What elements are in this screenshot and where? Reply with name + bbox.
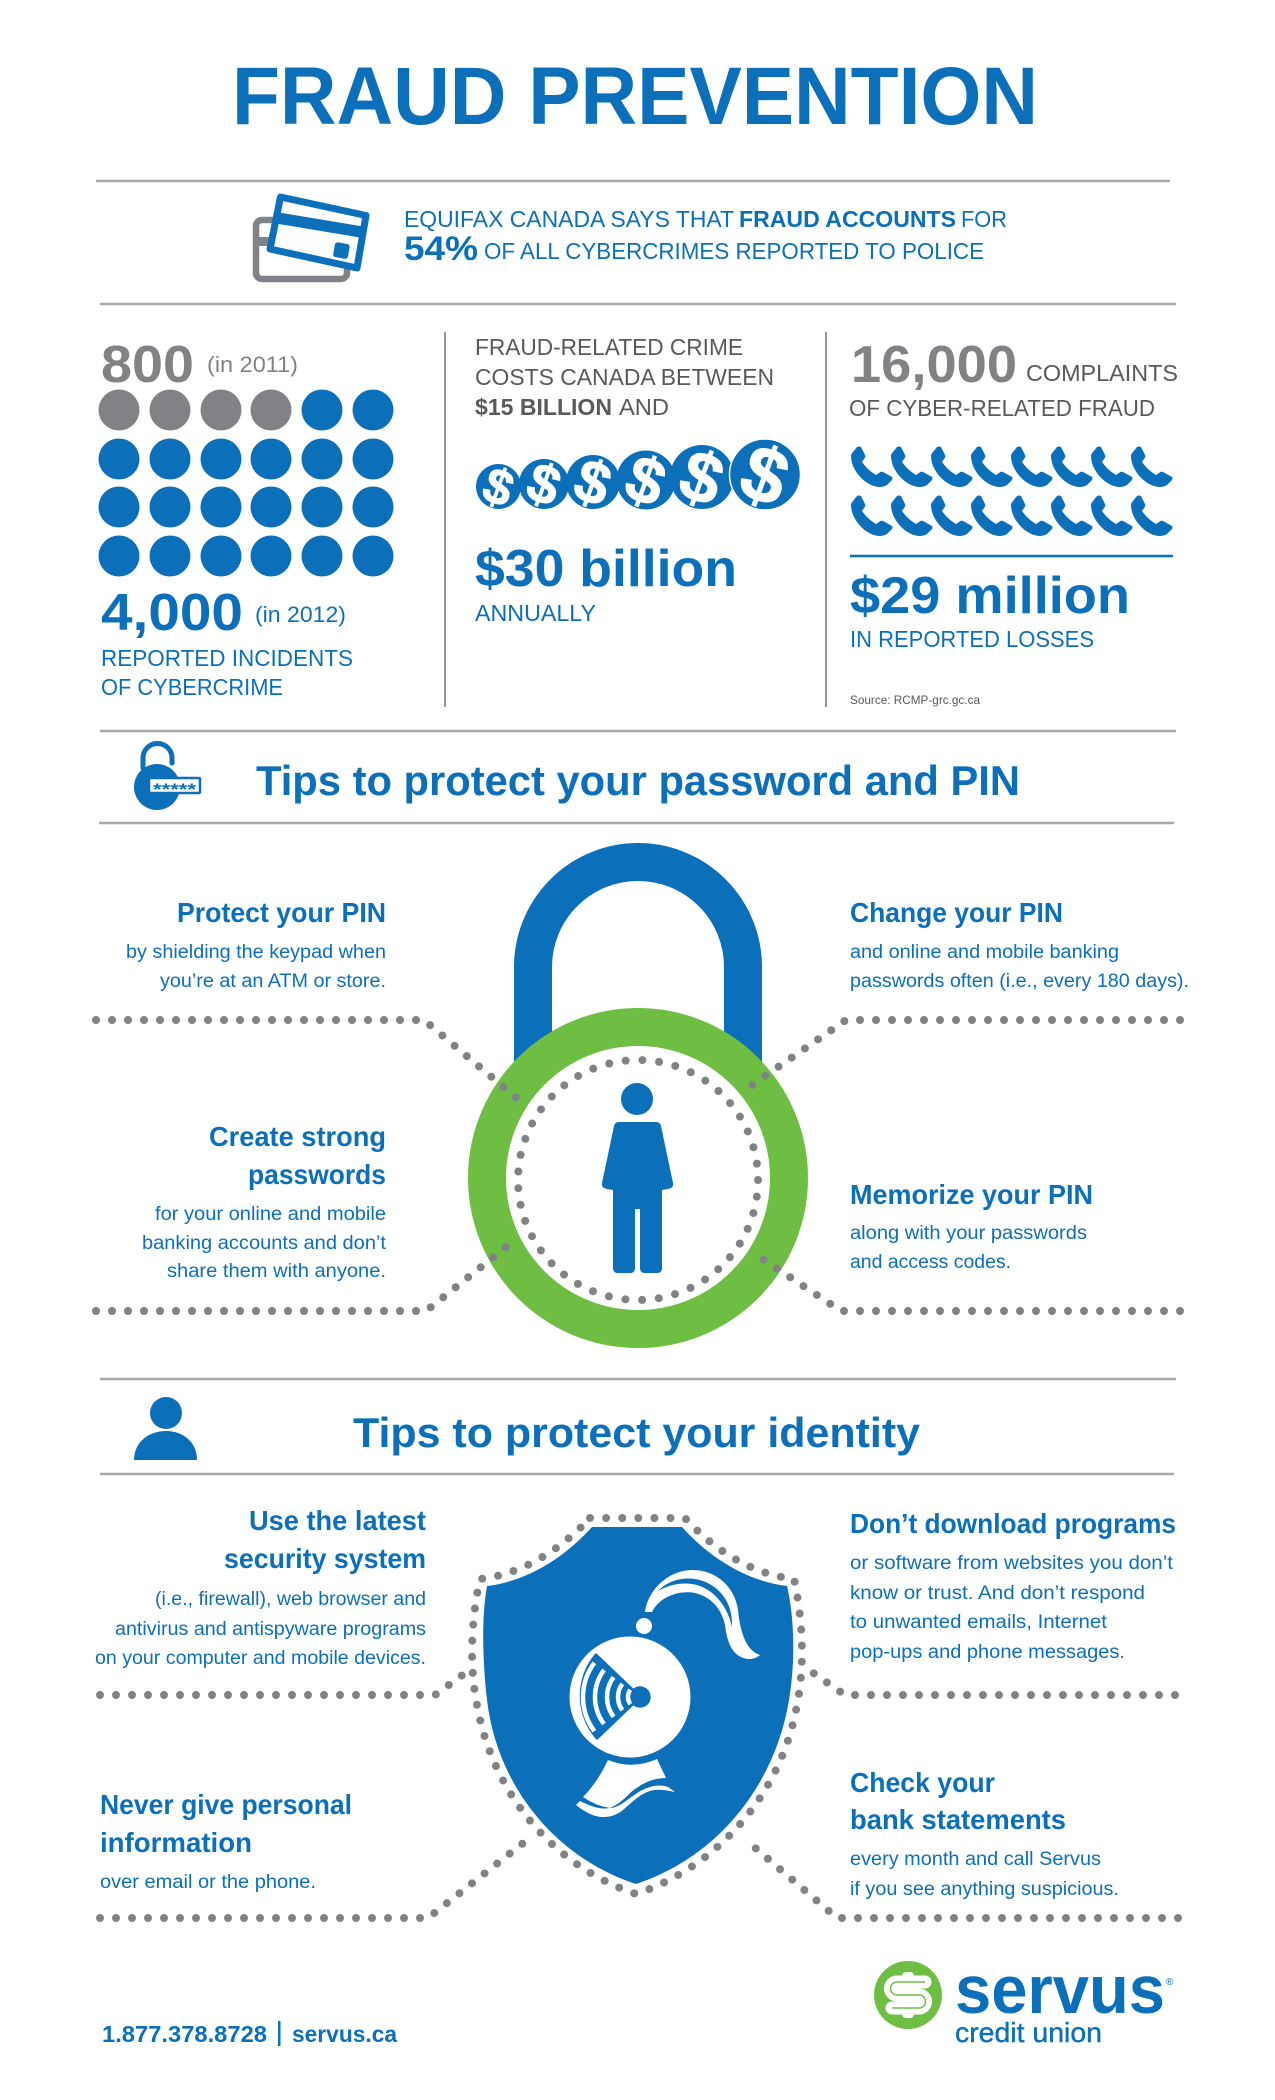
tip: check your bank statements: bank statements <box>850 1804 1066 1835</box>
tip: check your bank statements: Check your <box>850 1767 995 1798</box>
tip: use the latest security system: security system <box>224 1543 426 1574</box>
title: FRAUD PREVENTION <box>232 51 1038 142</box>
connector: latest security system <box>100 1671 468 1695</box>
tip: create strong passwords: Create strong <box>209 1121 386 1152</box>
tip: never give personal information: over email or the phone. <box>100 1872 316 1893</box>
icon: growing dollar coins: $ <box>476 456 521 518</box>
tip: don't download programs: pop-ups and phone messages. <box>850 1642 1125 1663</box>
connector: protect your PIN <box>96 1020 526 1106</box>
graphic: padlock with person <box>487 862 789 1329</box>
tip: check your bank statements: every month and call Servus <box>850 1849 1101 1870</box>
headline statistic: fraud accounts: FRAUD ACCOUNTS <box>739 206 956 232</box>
$29 million in reported losses: $29 million <box>850 567 1130 625</box>
logo: Servus Credit Union: credit union <box>955 2017 1102 2048</box>
16,000 complaints: COMPLAINTS <box>1026 360 1178 386</box>
headline statistic: fraud accounts <box>404 206 1007 268</box>
4,000 in 2012: 4,000 <box>101 584 243 642</box>
tip: protect your PIN <box>126 897 386 992</box>
headline statistic: fraud accounts: EQUIFAX CANADA SAYS THAT <box>404 206 734 232</box>
$30 billion annually: $30 billion <box>475 540 737 598</box>
intro text <box>475 334 774 420</box>
intro text: FRAUD-RELATED CRIME <box>475 334 743 360</box>
800 in 2011: (in 2011) <box>207 352 298 377</box>
icon: growing dollar coins <box>476 426 800 524</box>
icon: rows of telephones <box>851 446 1172 536</box>
tip: use the latest security system: (i.e., firewall), web browser and <box>155 1589 426 1610</box>
tip: change your PIN <box>850 897 1189 992</box>
tip: don't download programs <box>850 1508 1176 1663</box>
tip: create strong passwords: for your online and mobile <box>155 1204 386 1225</box>
tip: protect your PIN: you’re at an ATM or store. <box>160 971 386 992</box>
tip: use the latest security system: on your computer and mobile devices. <box>95 1648 426 1669</box>
helmet <box>570 1570 760 1817</box>
intro text: $15 BILLION <box>475 394 612 420</box>
tip: create strong passwords: banking accounts and don’t <box>142 1233 387 1254</box>
tip: don't download programs: or software from websites you don’t <box>850 1553 1174 1574</box>
connector: change your PIN <box>742 1020 1180 1092</box>
dot grid: 800 versus 4,000 <box>98 390 394 576</box>
tip: never give personal information <box>100 1789 352 1893</box>
icon: growing dollar coins: $ <box>729 426 800 524</box>
$30 billion annually: ANNUALLY <box>475 600 596 626</box>
tip: protect your PIN: by shielding the keypad when <box>126 942 386 963</box>
graphic: shield with knight helmet <box>472 1518 802 1894</box>
connector: never give personal information <box>100 1840 527 1918</box>
logo: Servus Credit Union: servus <box>955 1952 1165 2028</box>
logo: Servus Credit Union: ® <box>1166 1977 1174 1988</box>
icon: small padlock with password: ***** <box>153 780 196 799</box>
tip: create strong passwords: share them with anyone. <box>167 1261 386 1282</box>
tip: create strong passwords: passwords <box>248 1159 386 1190</box>
$29 million in reported losses <box>850 567 1130 652</box>
tip: never give personal information: information <box>100 1827 252 1858</box>
panel: cost of fraud <box>475 334 800 626</box>
tip: protect your PIN: Protect your PIN <box>177 897 386 928</box>
contact details: 1.877.378.8728 <box>102 2021 267 2047</box>
tip: don't download programs: Don’t download programs <box>850 1508 1176 1539</box>
headline statistic: fraud accounts: OF ALL CYBERCRIMES REPORTED TO POLICE <box>484 238 984 264</box>
4,000 in 2012: REPORTED INCIDENTS <box>101 645 353 671</box>
icon: small padlock with password <box>134 744 200 810</box>
tip: use the latest security system: Use the latest <box>249 1505 426 1536</box>
icon: growing dollar coins: $ <box>519 450 569 518</box>
intro text: AND <box>619 394 669 420</box>
tip: don't download programs: know or trust. And don’t respond <box>850 1583 1145 1604</box>
icon: growing dollar coins: $ <box>616 440 675 521</box>
tip: create strong passwords <box>142 1121 387 1282</box>
headline statistic: fraud accounts: FOR <box>961 206 1007 232</box>
heading: identity tips: Tips to protect your identity <box>353 1409 921 1456</box>
tip: use the latest security system: antivirus and antispyware programs <box>115 1619 426 1640</box>
panel: reported incidents of cybercrime <box>98 336 394 700</box>
tip: change your PIN: Change your PIN <box>850 897 1063 928</box>
connector: memorize your PIN <box>752 1252 1180 1311</box>
connector: check bank statements <box>746 1840 1178 1918</box>
icon: credit cards <box>256 197 366 279</box>
tip: never give personal information: Never give personal <box>100 1789 352 1820</box>
800 in 2011: 800 <box>101 336 194 394</box>
connector: don't download programs <box>809 1670 1175 1695</box>
tip: change your PIN: passwords often (i.e., every 180 days). <box>850 971 1189 992</box>
tip: memorize your PIN <box>850 1179 1093 1273</box>
tip: check your bank statements: if you see anything suspicious. <box>850 1879 1119 1900</box>
4,000 in 2012 <box>101 584 353 700</box>
contact details: servus.ca <box>292 2021 397 2047</box>
contact details <box>102 2021 397 2047</box>
tip: change your PIN: and online and mobile banking <box>850 942 1119 963</box>
4,000 in 2012: (in 2012) <box>255 602 346 627</box>
800 in 2011 <box>101 336 298 394</box>
panel: complaints and losses <box>849 336 1178 707</box>
headline statistic: fraud accounts: 54% <box>404 230 478 268</box>
16,000 complaints: 16,000 <box>851 336 1017 394</box>
icon: growing dollar coins: $ <box>669 435 734 522</box>
heading: password and PIN tips: Tips to protect your password and PIN <box>256 757 1020 804</box>
$29 million in reported losses: IN REPORTED LOSSES <box>850 626 1094 652</box>
16,000 complaints <box>849 336 1178 421</box>
tip: memorize your PIN: Memorize your PIN <box>850 1179 1093 1210</box>
tip: don't download programs: to unwanted emails, Internet <box>850 1612 1108 1633</box>
icon: growing dollar coins: $ <box>566 445 620 520</box>
connector: create strong passwords <box>96 1239 516 1311</box>
tip: memorize your PIN: along with your passwords <box>850 1223 1087 1244</box>
tip: memorize your PIN: and access codes. <box>850 1252 1011 1273</box>
$30 billion annually <box>475 540 737 626</box>
16,000 complaints: OF CYBER-RELATED FRAUD <box>849 395 1155 421</box>
logo: Servus Credit Union <box>874 1952 1174 2048</box>
tip: check your bank statements <box>850 1767 1119 1900</box>
4,000 in 2012: OF CYBERCRIME <box>101 674 283 700</box>
icon: person <box>134 1397 197 1460</box>
intro text: COSTS CANADA BETWEEN <box>475 364 774 390</box>
tip: use the latest security system <box>95 1505 426 1669</box>
source: Source: RCMP-grc.gc.ca <box>850 695 981 707</box>
